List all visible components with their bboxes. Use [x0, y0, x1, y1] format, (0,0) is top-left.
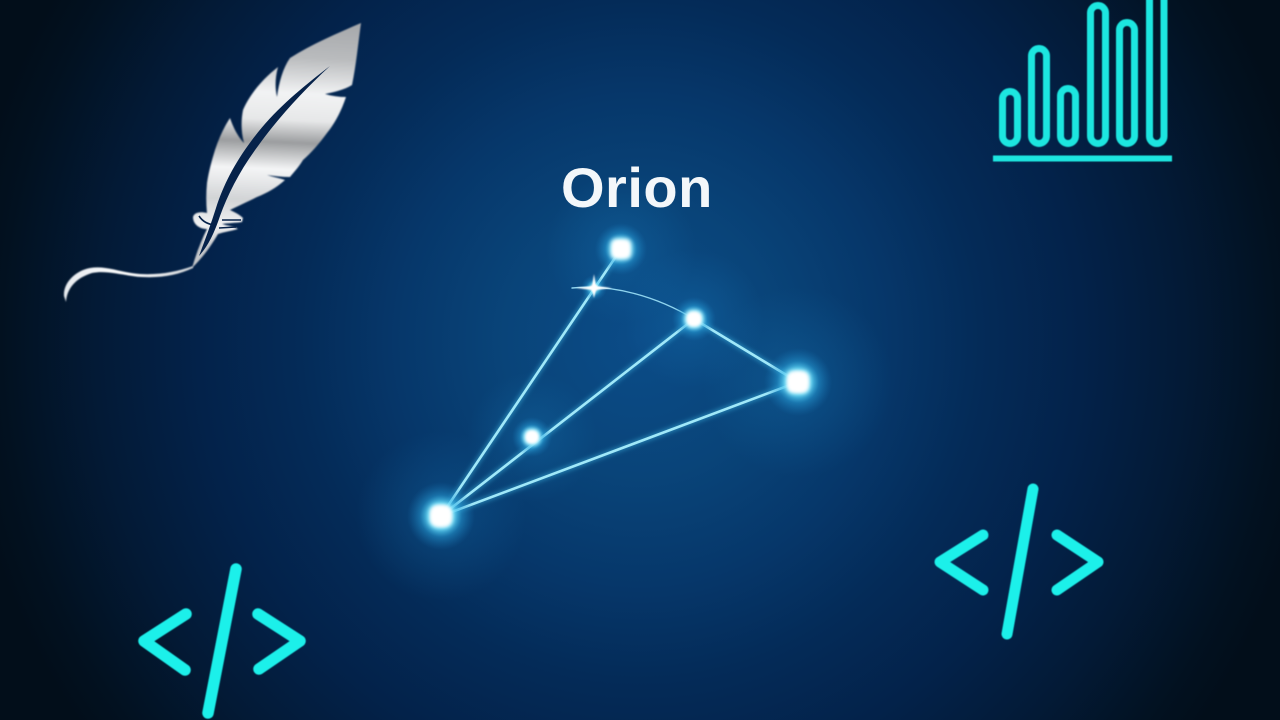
- icon: silver feather quill: [64, 23, 361, 302]
- star: bottom: [407, 482, 475, 550]
- chart baseline: [993, 156, 1172, 162]
- star: right: [764, 348, 832, 416]
- bar 6: [1150, 0, 1164, 144]
- constellation line glow: [441, 249, 798, 516]
- title: Orion: [561, 156, 713, 219]
- icon: code brackets bottom left: [144, 569, 300, 713]
- icon: code brackets bottom right: [940, 489, 1098, 634]
- ink tail: [64, 266, 193, 302]
- star: sparkle: [576, 274, 612, 301]
- bar 5: [1120, 22, 1134, 144]
- constellation: Orion: [407, 223, 832, 550]
- bar 4: [1090, 6, 1106, 144]
- icon: bar chart: [993, 0, 1172, 158]
- feather vane: [192, 23, 361, 268]
- constellation lines: [441, 249, 798, 516]
- star: middle: [512, 417, 552, 457]
- bar 2: [1032, 48, 1046, 144]
- star: top: [595, 223, 647, 275]
- star: shoulder: [672, 297, 716, 341]
- feather shaft: [199, 66, 330, 256]
- binding thread: [199, 216, 241, 228]
- bar 1: [1002, 92, 1018, 144]
- bar 3: [1060, 88, 1076, 144]
